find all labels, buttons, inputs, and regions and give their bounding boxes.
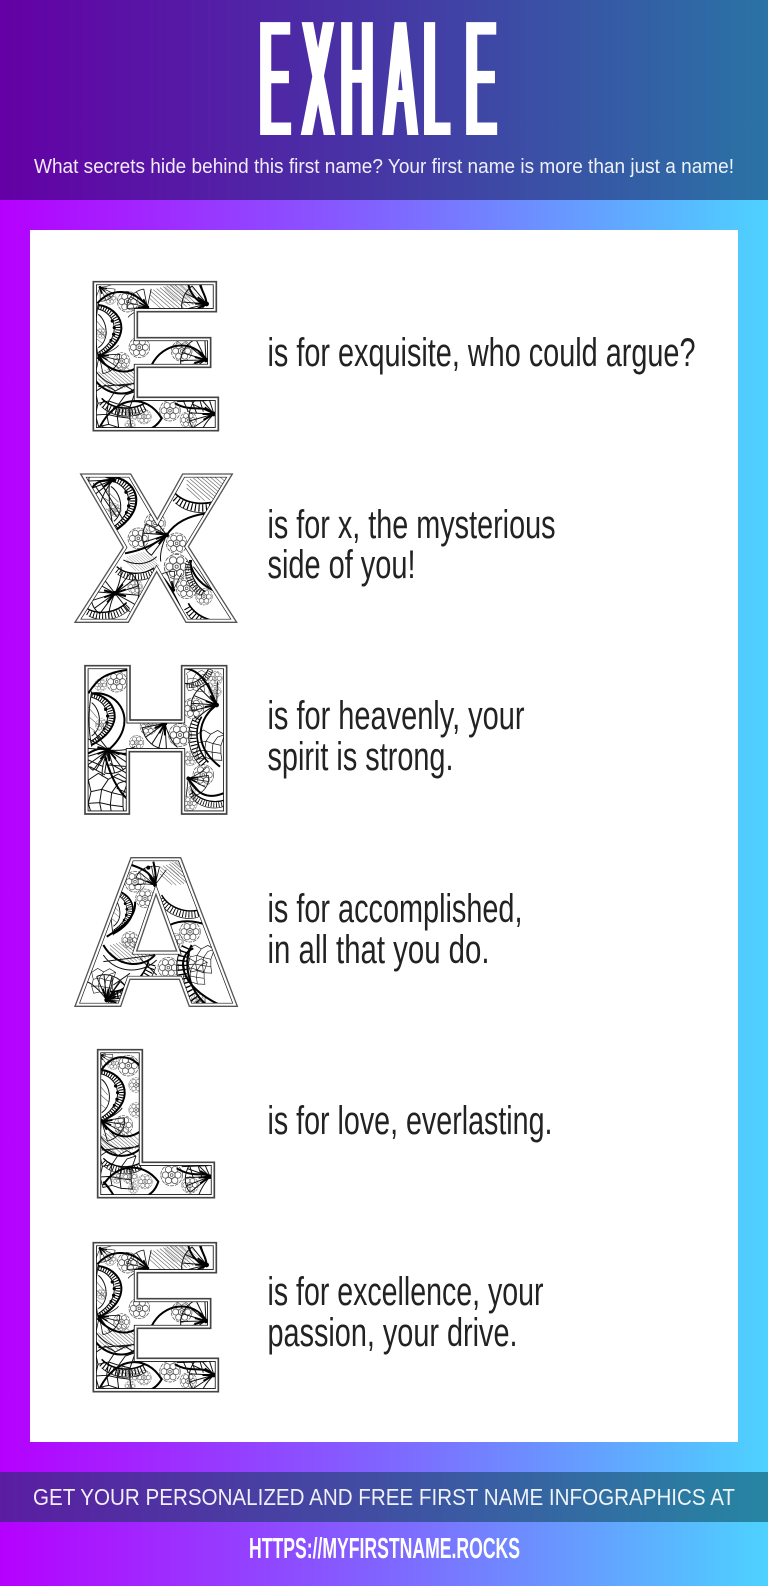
icon: zentangle letter E (second) bbox=[91, 1237, 220, 1399]
text: H lines: is for heavenly, your bbox=[268, 694, 524, 738]
text: A lines: in all that you do. bbox=[268, 928, 490, 972]
text: E second lines: passion, your drive. bbox=[268, 1311, 518, 1355]
white content panel bbox=[30, 230, 738, 1442]
footer url: HTTPS://MYFIRSTNAME.ROCKS bbox=[249, 1533, 520, 1565]
text: A lines: is for accomplished, bbox=[268, 887, 522, 931]
header band bbox=[0, 0, 768, 200]
icon: zentangle letter A bbox=[75, 856, 237, 1019]
text: X lines: is for x, the mysterious bbox=[268, 503, 556, 547]
text: A lines bbox=[268, 887, 522, 972]
icon: zentangle letter E bbox=[91, 276, 220, 438]
text: L line: is for love, everlasting. bbox=[268, 1099, 552, 1143]
footer band bbox=[0, 1472, 768, 1522]
text: H lines: spirit is strong. bbox=[268, 735, 454, 779]
text: H lines bbox=[268, 694, 524, 779]
icon: zentangle letter X bbox=[74, 473, 238, 623]
text: E second lines bbox=[268, 1270, 544, 1355]
text: E second lines: is for excellence, your bbox=[268, 1270, 544, 1314]
subtitle: What secrets hide behind this first name? Your first name is more than just a name! bbox=[34, 156, 734, 178]
icon: zentangle letter L bbox=[94, 1045, 217, 1203]
text: X lines bbox=[268, 503, 556, 587]
icon: zentangle letter H bbox=[75, 664, 227, 817]
text: X lines: side of you! bbox=[268, 543, 416, 587]
